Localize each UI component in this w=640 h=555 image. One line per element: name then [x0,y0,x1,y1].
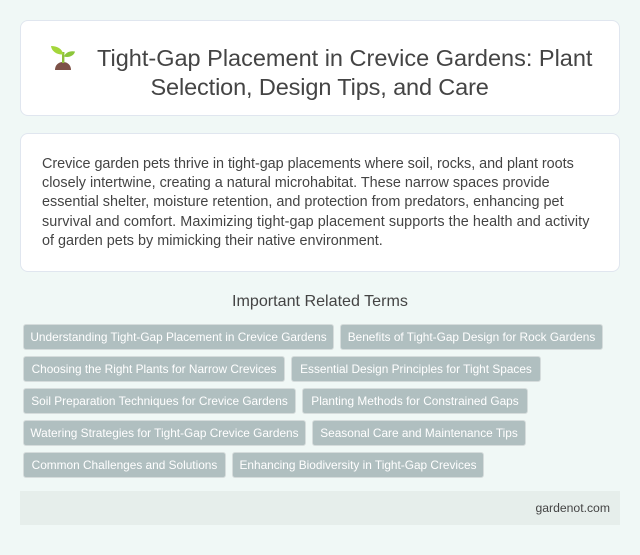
text block: description paragraph: closely intertwine, creating a natural microhabitat. These narrow spaces provide [42,175,550,191]
tag: Common Challenges and Solutions [32,458,217,472]
title: Selection, Design Tips, and Care [150,74,489,100]
tag: Understanding Tight-Gap Placement in Crevice Gardens [30,330,327,344]
text block: description paragraph: of garden pets by mimicking their native environment. [42,233,383,249]
footer source text: gardenot.com [535,501,610,515]
text block: description paragraph: Crevice garden pets thrive in tight-gap placements where soil, rocks, and plant roots [42,156,574,172]
tag [340,324,603,350]
tag [23,356,285,382]
tag [291,356,541,382]
panel: title card [20,20,620,116]
tag [232,452,484,478]
tag: Soil Preparation Techniques for Crevice Gardens [31,394,288,408]
text block: description paragraph: survival and comfort. Maximizing tight-gap placement supports the health and activity [42,214,589,230]
title: Tight-Gap Placement in Crevice Gardens: Plant [97,45,592,71]
panel: description [20,133,620,272]
footer [20,491,620,525]
tag [302,388,528,414]
tag: Watering Strategies for Tight-Gap Crevice Gardens [30,426,299,440]
panel: related term tags [23,324,603,478]
tag: Benefits of Tight-Gap Design for Rock Gardens [348,330,595,344]
tag: Essential Design Principles for Tight Spaces [300,362,532,376]
tag [23,388,296,414]
tag [23,324,334,350]
tag: Choosing the Right Plants for Narrow Crevices [32,362,276,376]
text block: description paragraph [42,156,590,249]
tag [23,420,306,446]
icon: seedling [51,46,75,70]
tag [23,452,226,478]
text block: description paragraph: essential shelter, moisture retention, and protection from predators, enhancing pet [42,194,564,210]
tag: Enhancing Biodiversity in Tight-Gap Crevices [240,458,476,472]
heading: important related terms: Important Related Terms [232,292,408,310]
tag: Seasonal Care and Maintenance Tips [320,426,518,440]
tag: Planting Methods for Constrained Gaps [311,394,519,408]
tag [312,420,526,446]
title [97,45,592,100]
